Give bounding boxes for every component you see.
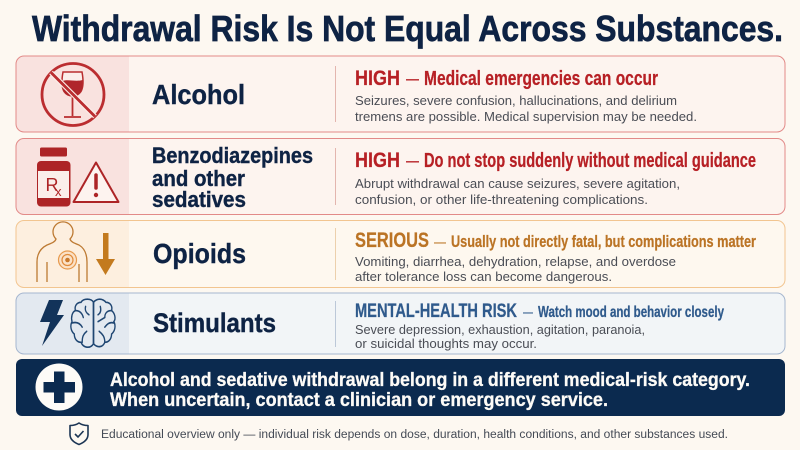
label: stimulants: Stimulants [153, 308, 276, 338]
description: alcohol [355, 93, 697, 124]
panel: stimulants [16, 293, 785, 354]
label: benzodiazepines: and other [152, 166, 245, 191]
footer text: Educational overview only — individual risk depends on dose, duration, health conditions, and other substances used. [101, 429, 728, 441]
callout text [110, 370, 750, 411]
description: benzodiazepines: Abrupt withdrawal can cause seizures, severe agitation, [355, 176, 680, 191]
icon: body with pain and down arrow [37, 222, 115, 282]
icon: no alcohol [42, 64, 104, 126]
description: opioids: Vomiting, diarrhea, dehydration, relapse, and overdose [355, 254, 676, 269]
callout banner [16, 359, 785, 416]
risk heading: alcohol: HIGH [355, 67, 400, 90]
callout text: When uncertain, contact a clinician or emergency service. [110, 390, 608, 411]
risk heading: stimulants: MENTAL-HEALTH RISK [355, 300, 517, 322]
description: stimulants: or suicidal thoughts may occur. [355, 336, 537, 351]
icon: pill bottle and warning: R [46, 175, 58, 195]
risk heading: opioids [355, 229, 756, 252]
description: stimulants: Severe depression, exhaustion, agitation, paranoia, [355, 322, 645, 337]
risk heading: alcohol [355, 67, 658, 90]
icon: pill bottle and warning [37, 148, 118, 206]
label: benzodiazepines: Benzodiazepines [152, 143, 313, 168]
callout text: Alcohol and sedative withdrawal belong in a different medical-risk category. [110, 370, 750, 391]
icon: lightning and brain [40, 299, 115, 347]
description: benzodiazepines [355, 176, 680, 207]
risk heading: opioids: SERIOUS [355, 229, 429, 252]
footer note [70, 423, 728, 444]
label: benzodiazepines: sedatives [152, 187, 246, 212]
risk heading: stimulants: — [523, 304, 533, 321]
icon: medical cross [36, 364, 82, 410]
panel: alcohol [16, 56, 785, 132]
label: alcohol: Alcohol [152, 79, 245, 110]
description: benzodiazepines: confusion, or other life-threatening complications. [355, 192, 648, 207]
panel: benzodiazepines [16, 138, 785, 214]
risk heading: opioids: — [434, 234, 446, 251]
panel: opioids [16, 220, 785, 288]
description: opioids [355, 254, 676, 284]
icon: pill bottle and warning: x [55, 184, 62, 199]
description: stimulants [355, 322, 645, 351]
label: benzodiazepines [152, 143, 313, 212]
icon: shield check [70, 423, 88, 444]
risk heading: alcohol: Medical emergencies can occur [424, 68, 658, 90]
risk heading: alcohol: — [406, 68, 419, 90]
risk heading: benzodiazepines: HIGH [355, 149, 400, 172]
risk heading: stimulants: Watch mood and behavior closely [538, 304, 724, 321]
risk heading: benzodiazepines: — [406, 150, 419, 172]
description: alcohol: Seizures, severe confusion, hallucinations, and delirium [355, 93, 677, 108]
label: opioids: Opioids [153, 238, 246, 269]
description: alcohol: tremens are possible. Medical supervision may be needed. [355, 109, 697, 124]
risk heading: stimulants [355, 300, 724, 322]
description: opioids: after tolerance loss can become dangerous. [355, 269, 612, 284]
